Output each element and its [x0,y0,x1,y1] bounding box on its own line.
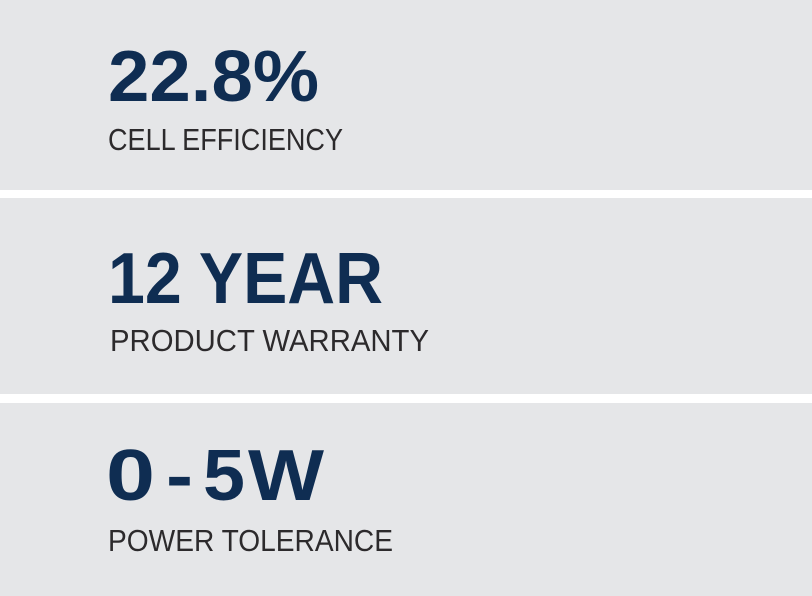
stat: 0-5W: 0 [106,436,155,516]
panel: cell efficiency [0,0,812,190]
stat: 0-5W: 5 [203,436,245,516]
stat: 0-5W [106,436,324,516]
stat: 22.8%: 22.8% [108,37,319,117]
stat: 12 year: 12 YEAR [108,239,383,319]
stat: 0-5W: W [248,436,324,516]
label: cell efficiency: CELL EFFICIENCY [108,122,343,157]
label: power tolerance: POWER TOLERANCE [108,523,393,558]
panel: power tolerance [0,403,812,596]
panel: product warranty [0,198,812,394]
stat: 0-5W: - [166,436,193,516]
label: product warranty: PRODUCT WARRANTY [110,323,429,358]
